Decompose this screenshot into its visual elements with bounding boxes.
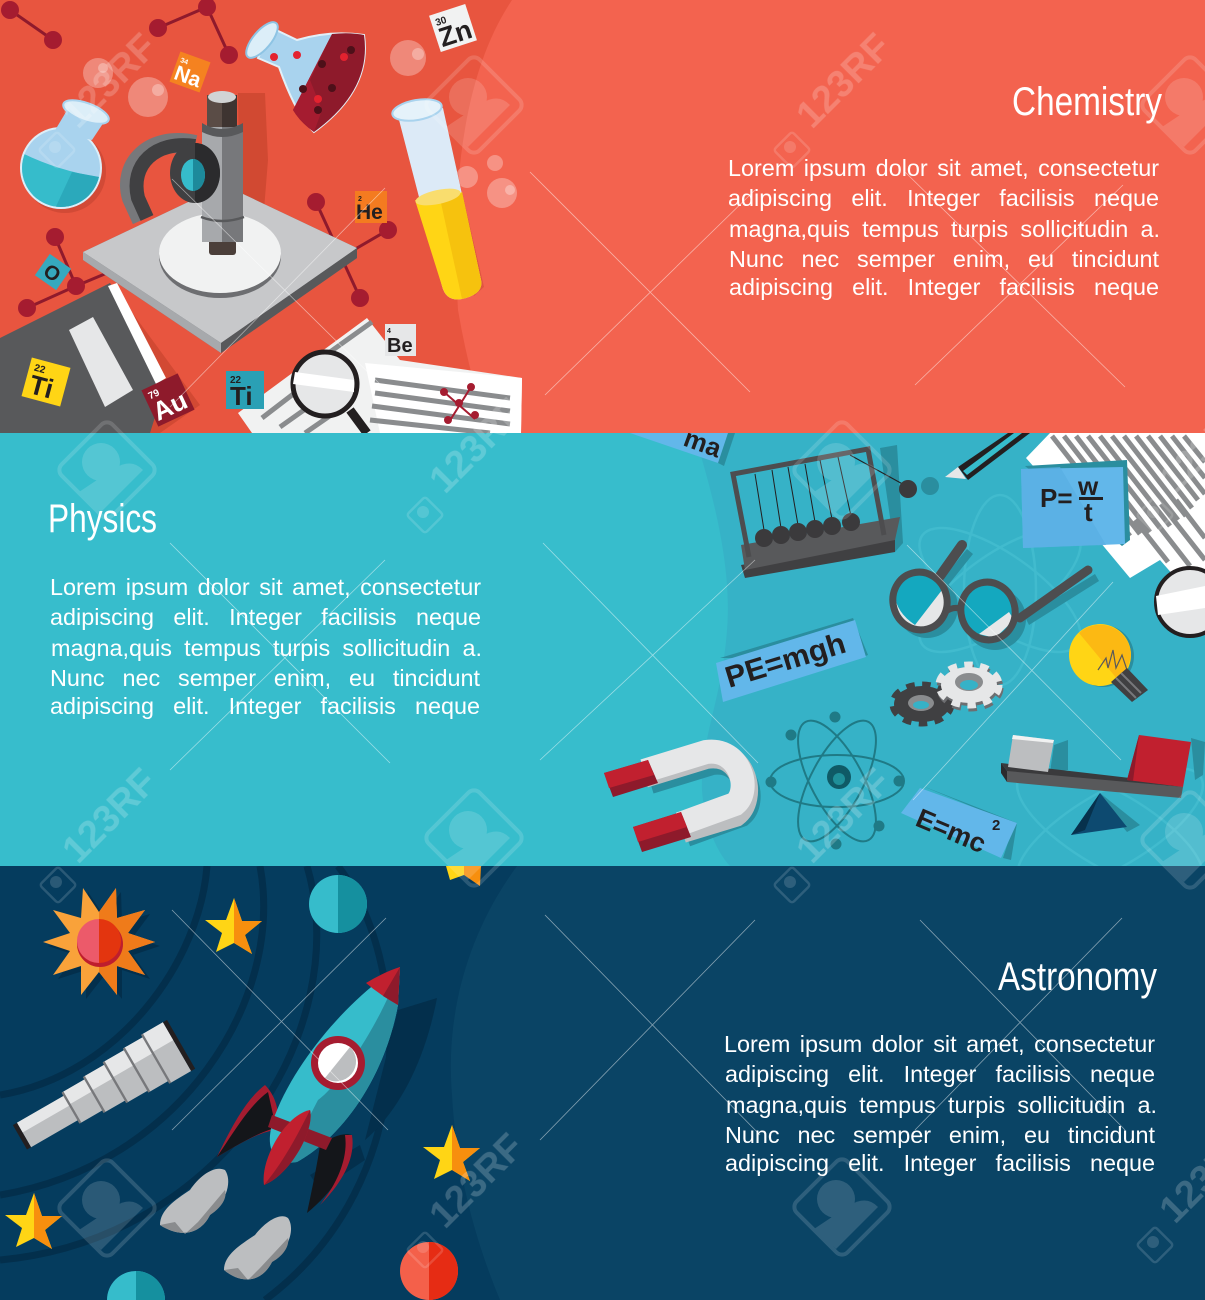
text block: chemistry: Nunc nec semper enim, eu tincidunt [729,246,1159,272]
icon: newton's cradle [733,445,939,578]
icon: star lower left [5,1193,62,1249]
icon: tile Zn: Zn [435,14,476,53]
text block: chemistry: Lorem ipsum dolor sit amet, consectetur [728,155,1159,181]
formula tile: P=w/t: w [1077,471,1099,501]
darker right background [694,433,1205,866]
text block: chemistry: adipiscing elit. Integer facilisis neque [729,274,1159,300]
icon: star right [423,1125,480,1181]
icon: tile Be [385,324,416,357]
text block: astronomy: Lorem ipsum dolor sit amet, consectetur [724,1031,1155,1057]
text block: astronomy: adipiscing elit. Integer facilisis neque [725,1150,1155,1176]
text block: physics: adipiscing elit. Integer facilisis neque [50,693,480,719]
icon: gears [894,667,998,722]
formula tile: E=mc2 [901,785,1017,860]
icon: teal planet [309,875,367,933]
icon: star top clipped [446,866,481,886]
text block: chemistry: magna,quis tempus turpis sollicitudin a. [729,216,1160,242]
watermark overlay: 123RF [789,761,899,871]
molecules [1,0,397,317]
text block: physics: Nunc nec semper enim, eu tincidunt [50,665,480,691]
icon: rocket [217,967,437,1213]
formula tile: ma [630,422,735,466]
icon: tile O [35,254,71,290]
formula tile: PE=mgh: PE=mgh [721,627,850,695]
icon: tile Be: Be [387,335,413,357]
icon: tile Ti yellow: Ti [26,369,57,404]
icon: test tube [391,96,484,299]
icon: light bulb [1069,624,1148,702]
icon: tilted red flask [241,17,365,132]
icon: papers with magnifier [238,318,522,433]
icon: tile He: He [356,201,383,224]
icon: seesaw with weights [1001,735,1205,835]
darker left background [0,866,517,1300]
icon: microscope [83,91,357,353]
icon: teal planet bottom [107,1271,165,1300]
icon: tile Na [169,51,211,93]
watermark overlay: 123RF [422,391,532,501]
icon: tile He [355,191,387,224]
icon: book [0,283,200,433]
heading: Physics: Physics [48,497,157,541]
text block: astronomy: Nunc nec semper enim, eu tincidunt [725,1122,1155,1148]
watermark overlay: 123RF [422,1126,532,1236]
panel: chemistry [0,0,1205,433]
icon: round flask [20,95,112,215]
icon: tile Be: 4 [387,328,391,335]
heading: Chemistry: Chemistry [1012,80,1162,124]
icon: tile Ti yellow: 22 [33,363,47,376]
watermark overlay: 123RF [55,761,165,871]
formula tile: E=mc2: E=mc [912,803,990,859]
icon: eyeglasses [886,545,1099,650]
icon: tile Ti teal: Ti [230,381,253,411]
text block: physics: Lorem ipsum dolor sit amet, consectetur [50,574,481,600]
icon: tile Na: Na [171,62,204,92]
watermark overlay: 123RF [55,26,165,136]
icon: atom [766,710,904,852]
icon: magnet [604,752,749,852]
icon: sheets of paper [1026,433,1205,610]
icon: tile Ti yellow [21,358,70,407]
icon: tile Zn [429,4,478,54]
text block: chemistry: adipiscing elit. Integer facilisis neque [728,185,1159,211]
icon: sun [43,888,160,999]
faint atom pattern [902,495,1205,915]
icon: pencil [945,433,1030,480]
text block: chemistry [728,155,1160,300]
icon: tile Na: 34 [179,57,189,66]
icon: tile Ti teal [226,371,264,411]
bubbles [83,40,517,208]
icon: tile Ti teal: 22 [230,375,242,386]
icon: exhaust cloud two [224,1216,291,1280]
panel: physics [0,433,1205,866]
text block: astronomy [724,1031,1157,1176]
icon: tile Au: Au [148,385,192,427]
text block: physics [50,574,482,719]
icon: tile O: O [39,260,64,287]
icon: tile Zn: 30 [434,15,448,29]
watermark overlay: 123RF [789,26,899,136]
icon: tile Au [141,373,195,427]
text block: physics: magna,quis tempus turpis sollicitudin a. [51,635,482,661]
orbits [0,866,390,1300]
formula tile: E=mc2: 2 [992,817,1000,834]
icon: telescope [6,1020,195,1162]
formula tile: P=w/t: P= [1040,483,1073,513]
icon: red planet [400,1242,458,1300]
formula tile: PE=mgh [716,618,868,702]
formula tile: P=w/t: t [1084,497,1093,527]
icon: magnifier partial [1156,568,1205,636]
text block: physics: adipiscing elit. Integer facilisis neque [50,604,481,630]
formula tile: P=w/t [1021,460,1130,548]
text block: astronomy: magna,quis tempus turpis sollicitudin a. [726,1092,1157,1118]
icon: tile He: 2 [358,196,362,203]
heading: Astronomy: Astronomy [998,955,1157,999]
text block: astronomy: adipiscing elit. Integer facilisis neque [725,1061,1155,1087]
icon: tile Au: 79 [147,387,162,402]
icon: exhaust cloud one [160,1169,228,1234]
darker left background [0,0,512,433]
icon: star upper [205,898,262,954]
panel: astronomy [0,866,1205,1300]
